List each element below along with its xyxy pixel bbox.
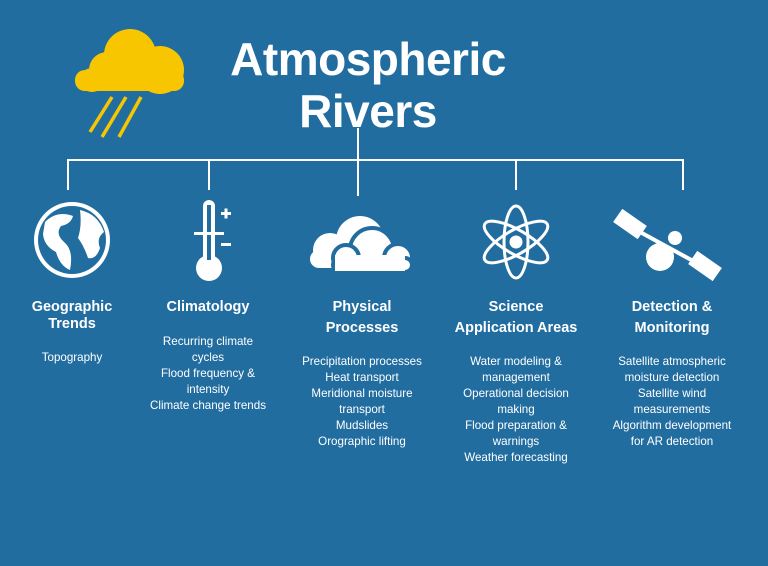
title [230,33,506,137]
heading [632,299,712,336]
body: Meridional moisture [311,387,413,400]
heading [455,299,577,336]
icon: yellow rain cloud [75,29,184,138]
column: geographic trends [32,299,112,364]
heading: Physical [333,299,391,315]
column: detection & monitoring [612,299,732,448]
heading: Geographic [32,299,112,315]
tree connector lines [67,128,684,196]
heading: Processes [326,320,398,336]
body: Topography [42,351,102,364]
body [463,355,569,464]
body: Operational decision [463,387,569,400]
body: warnings [493,435,539,448]
body: moisture detection [625,371,719,384]
body: Heat transport [325,371,399,384]
body: Weather forecasting [464,451,568,464]
body: Orographic lifting [318,435,406,448]
column: science application areas [455,299,577,464]
body: Climate change trends [150,399,266,412]
heading: Detection & [632,299,712,315]
body: Algorithm development [613,419,731,432]
body: Flood frequency & [161,367,255,380]
icon: satellite [613,208,722,282]
body: Mudslides [336,419,388,432]
body: for AR detection [631,435,713,448]
heading [32,299,112,332]
body [612,355,732,448]
heading: Science [489,299,543,315]
icon: globe [34,202,110,278]
title: Atmospheric [230,33,506,85]
body: intensity [187,383,229,396]
body: Water modeling & [470,355,562,368]
column: climatology [150,299,266,412]
body: Recurring climate [163,335,253,348]
heading [326,299,398,336]
body: Satellite wind [638,387,706,400]
heading: Trends [48,316,96,332]
body: cycles [192,351,224,364]
body: Flood preparation & [465,419,567,432]
body: Satellite atmospheric [618,355,726,368]
body: measurements [634,403,710,416]
body: Precipitation processes [302,355,422,368]
column: physical processes [302,299,422,448]
body [302,355,422,448]
body: management [482,371,550,384]
heading: Climatology [166,299,249,315]
body [150,335,266,412]
icon: thermometer [194,200,231,281]
icon: clouds [310,216,410,271]
heading: Monitoring [635,320,709,336]
heading: Application Areas [455,320,577,336]
title: Rivers [299,85,437,137]
body: transport [339,403,385,416]
body: making [497,403,535,416]
icon: atom [482,204,550,280]
